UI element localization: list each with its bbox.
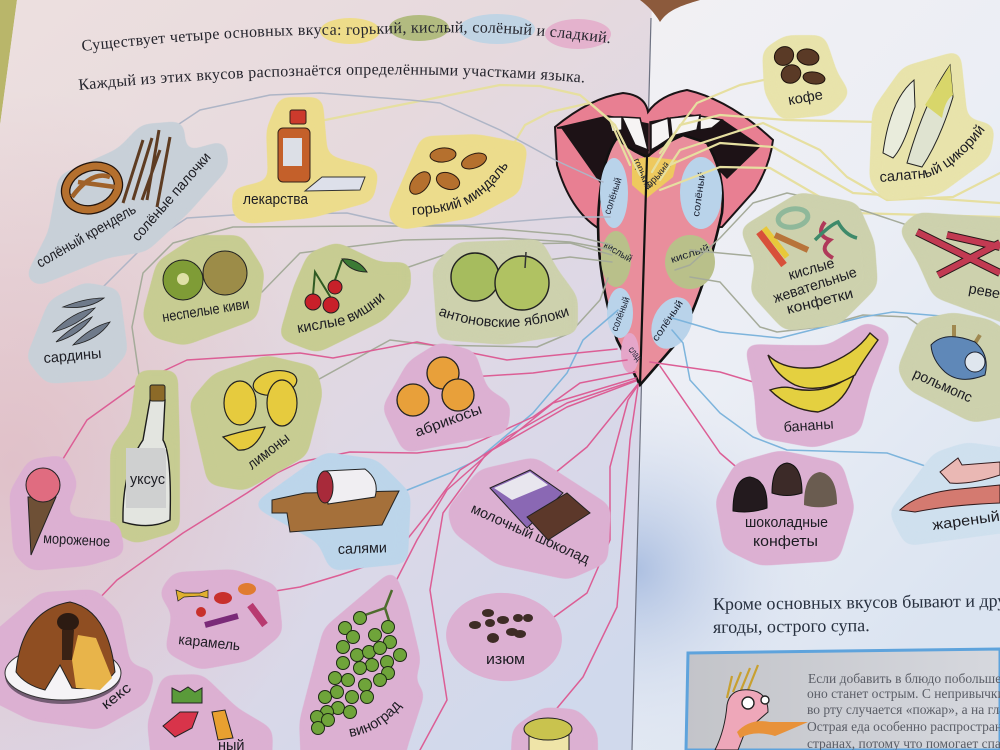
- sweet zone: [621, 333, 639, 373]
- item: raisins: [442, 588, 566, 686]
- zone labels: солёный: [691, 171, 708, 217]
- item: coffee beans: [766, 39, 846, 116]
- mouth interior: [557, 115, 760, 182]
- connector lines: sweet: [58, 342, 770, 750]
- teeth: [608, 115, 722, 150]
- item: honey jar: [514, 711, 594, 750]
- intro highlights: taste colours: [320, 14, 611, 49]
- item: ice cream: мороженое: [43, 531, 111, 551]
- intro text: taste zones: Каждый из этих вкусов распознаётся определёнными участками языка.: [78, 64, 584, 90]
- item: antonovka apples: [432, 239, 578, 345]
- item: vinegar bottle: [114, 374, 176, 540]
- item: gummy candies: [151, 678, 269, 750]
- item: antonovka apples: антоновские яблоки: [439, 308, 569, 328]
- tongue body: [598, 135, 723, 385]
- item: chocolate candies: конфеты: [753, 534, 818, 550]
- item: pretzel and salted sticks: солёные палочки: [129, 150, 214, 245]
- item: endive: салатный цикорий: [880, 124, 985, 182]
- item: pretzel and salted sticks: солёный крендель: [34, 202, 139, 271]
- item: chocolate candies: шоколадные: [745, 515, 828, 531]
- item: sour cherries: кислые вишни: [298, 293, 385, 333]
- item: sour chewy candies: кислые: [787, 256, 836, 284]
- item: sardines: сардины: [43, 346, 102, 367]
- item: bitter almonds: [389, 134, 527, 229]
- salty zones: [600, 157, 722, 356]
- tongue and lips: [555, 90, 773, 385]
- item: salami: [258, 456, 407, 567]
- item: rollmops: рольмопс: [910, 366, 974, 406]
- item: chocolate candies: [719, 454, 851, 562]
- connector lines: sour: [132, 193, 930, 383]
- item: cake: [0, 593, 151, 726]
- icon: fire-breathing boy: [715, 665, 808, 750]
- item: vinegar bottle: уксус: [130, 472, 165, 488]
- item: bitter almonds: горький миндаль: [412, 164, 508, 217]
- zone labels: солёный: [610, 296, 633, 333]
- item: lemons: лимоны: [245, 430, 293, 473]
- item: bananas: [749, 326, 887, 444]
- item: coffee beans: кофе: [787, 87, 824, 109]
- item: salami: салями: [338, 540, 387, 558]
- item: ice cream: [13, 459, 121, 567]
- connector lines: bitter: [325, 78, 1000, 217]
- connector lines: salty grey: [100, 93, 610, 290]
- paragraph: other tastes: ягоды, острого супа.: [713, 615, 870, 637]
- item: apricots: [386, 346, 507, 449]
- item: fried bacon: [893, 446, 1000, 542]
- item: cake: кекс: [99, 680, 134, 713]
- lips: [555, 90, 773, 228]
- item: milk chocolate: [451, 461, 607, 576]
- item: sour chewy candies: [744, 196, 874, 327]
- item: rhubarb: [903, 216, 1000, 325]
- item: sour cherries: [281, 244, 412, 352]
- item: unripe kiwi: неспелые киви: [161, 296, 251, 326]
- item: raisins: изюм: [486, 652, 525, 668]
- spicy note text: [807, 671, 1000, 750]
- item: rollmops: [901, 316, 1000, 419]
- item: sour chewy candies: конфетки: [785, 286, 855, 318]
- zone labels: солёный: [602, 176, 625, 216]
- spicy note text: Если добавить в блюдо побольше: [808, 671, 1000, 686]
- item: unripe kiwi: [146, 239, 261, 342]
- panel: spicy food note: [686, 649, 1000, 750]
- item: milk chocolate: молочный шоколад: [468, 501, 592, 568]
- item: caramel candies: [163, 573, 279, 666]
- item: bananas: бананы: [783, 417, 834, 436]
- item: lemons: [193, 359, 319, 487]
- zone labels: солёный: [650, 299, 686, 344]
- sour zones: [601, 231, 715, 289]
- item: endive: [869, 53, 994, 200]
- item: medicine: [236, 101, 375, 220]
- connector lines: salty blue: [400, 310, 1000, 493]
- paragraph: other tastes: [713, 590, 1000, 637]
- zone labels: кислый: [670, 243, 711, 266]
- zone labels: кислый: [602, 240, 634, 265]
- intro text: four basic tastes: Существует четыре основных вкуса: горький, кислый, солёный и сладкий.: [82, 21, 610, 54]
- item: grapes: виноград: [349, 702, 404, 737]
- item: caramel candies: карамель: [178, 632, 241, 654]
- item: sardines: [30, 286, 124, 380]
- item: apricots: абрикосы: [413, 402, 484, 441]
- item: sour chewy candies: жевательные: [771, 265, 859, 307]
- zone labels: горький: [630, 157, 654, 191]
- item: grapes: [299, 574, 423, 750]
- zone labels: горький: [642, 161, 673, 192]
- item: medicine: лекарства: [243, 192, 309, 208]
- bitter zone: [632, 157, 677, 198]
- zone labels: [602, 157, 711, 364]
- item: pretzel and salted sticks: [30, 125, 225, 282]
- zone labels: слад: [626, 345, 644, 364]
- spicy note text: оно станет острым. С непривычки: [807, 686, 1000, 701]
